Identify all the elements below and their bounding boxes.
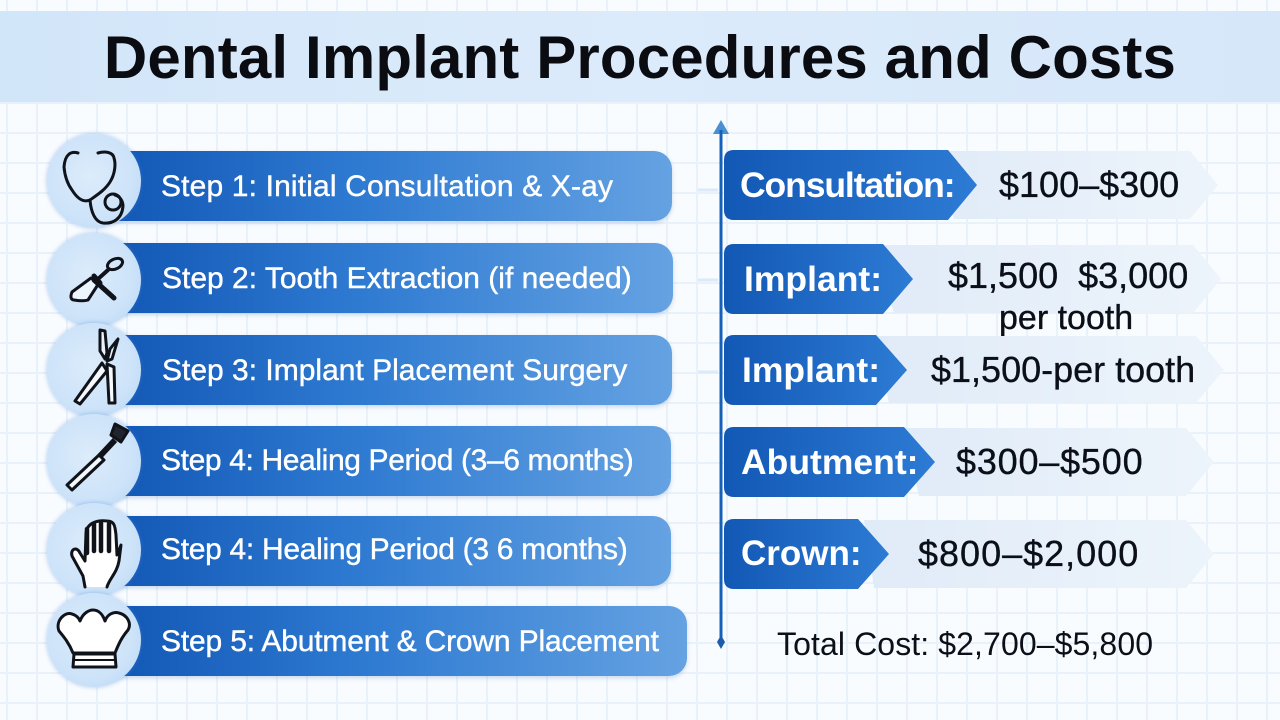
step 3 bar: [112, 335, 672, 405]
cost row: crown: Crown:: [741, 534, 862, 573]
cost row: consultation: $100–$300: [999, 164, 1179, 205]
cost row: abutment: $300–$500: [956, 441, 1143, 482]
title: Dental Implant Procedures and Costs: [104, 24, 1176, 91]
cost row: implant: Implant:: [744, 259, 882, 299]
icon: gloved hand: [47, 503, 141, 597]
title: [0, 11, 1280, 102]
step 5 bar: Step 5: Abutment & Crown Placement: [161, 625, 659, 658]
step 2 bar: Step 2: Tooth Extraction (if needed): [162, 262, 632, 295]
step 1 bar: [112, 151, 672, 221]
text: per tooth: per tooth: [999, 299, 1133, 337]
cost row: abutment: [724, 427, 1214, 497]
cost row: implant repeat: Implant:: [742, 350, 880, 390]
icon: stethoscope: [47, 134, 141, 228]
step 2 bar: [112, 243, 673, 313]
cost row: implant repeat: [724, 335, 1224, 405]
cost row: consultation: Consultation:: [740, 165, 954, 205]
step 3 bar: Step 3: Implant Placement Surgery: [162, 354, 627, 387]
step 1 bar: Step 1: Initial Consultation & X-ay: [161, 170, 613, 203]
cost row: implant repeat: $1,500-per tooth: [931, 349, 1195, 390]
icon: chef hat crown: [47, 593, 141, 687]
icon: extraction tool: [47, 233, 141, 327]
cost row: abutment: Abutment:: [741, 442, 918, 482]
faint connector lines: [698, 188, 718, 374]
icon: dental probe: [47, 414, 141, 508]
panel: procedure steps: [44, 131, 689, 690]
step 4 bar: Step 4: Healing Period (3–6 months): [161, 444, 633, 477]
icon: surgical pliers: [47, 323, 141, 417]
cost row: crown: [724, 519, 1214, 589]
cost row: implant: $1,500 $3,000: [948, 255, 1188, 296]
cost row: implant: [724, 244, 1220, 314]
step 4 repeated bar: Step 4: Healing Period (3 6 months): [161, 533, 627, 566]
cost row: consultation: [724, 150, 1218, 220]
cost row: crown: $800–$2,000: [918, 533, 1139, 574]
timeline arrow: [713, 120, 729, 649]
step 4 bar: [112, 426, 671, 496]
step 4 repeated bar: [112, 516, 671, 586]
step 5 bar: [112, 606, 687, 676]
total cost: Total Cost: $2,700–$5,800: [777, 626, 1153, 662]
